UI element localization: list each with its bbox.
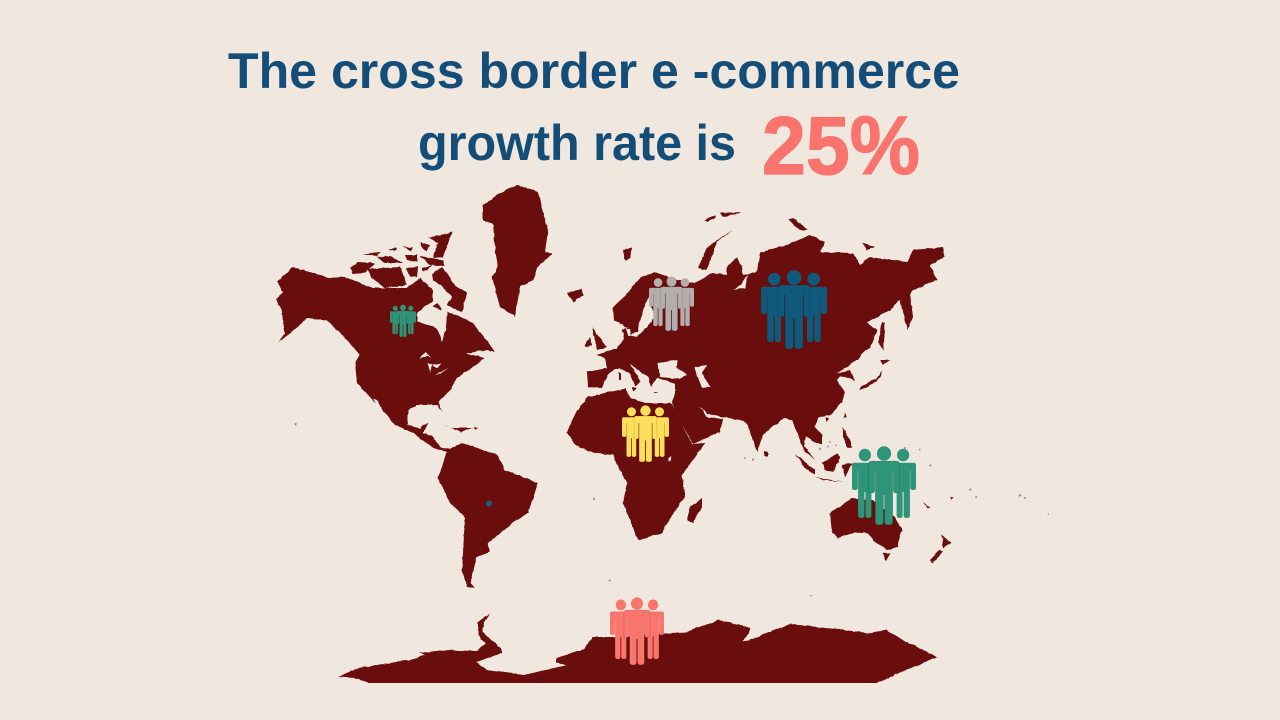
title line one: The cross border e -commerce	[228, 43, 960, 99]
Baja California slit	[373, 398, 385, 415]
people icon: Asia (blue)	[761, 270, 827, 349]
Madagascar	[687, 498, 702, 523]
people icon: Antarctica (salmon)	[610, 597, 664, 665]
growth rate figure: 25%	[762, 100, 920, 192]
Caribbean islands	[437, 422, 478, 432]
title line two: growth rate is	[418, 115, 736, 171]
title	[228, 43, 960, 171]
Iceland	[567, 289, 584, 302]
Antarctica	[338, 614, 937, 683]
Australia and New Zealand	[830, 497, 953, 563]
Africa	[567, 388, 705, 540]
people icon: Oceania (green)	[852, 446, 916, 525]
seas and lakes cut from the land	[420, 275, 748, 462]
Eurasia	[587, 235, 945, 460]
world map	[276, 185, 1049, 683]
small Pacific islands	[295, 423, 1049, 597]
North and Central America	[276, 267, 495, 452]
Europe and Asia islands	[584, 212, 890, 482]
South America	[438, 443, 538, 588]
Canadian Arctic islands	[350, 232, 467, 312]
Greenland	[483, 185, 553, 317]
people icon: Africa (yellow)	[622, 405, 669, 462]
people icon: South America (blue dot)	[486, 500, 492, 506]
people icon: Europe (grey)	[649, 276, 694, 331]
people icon: North America (green)	[390, 305, 416, 337]
